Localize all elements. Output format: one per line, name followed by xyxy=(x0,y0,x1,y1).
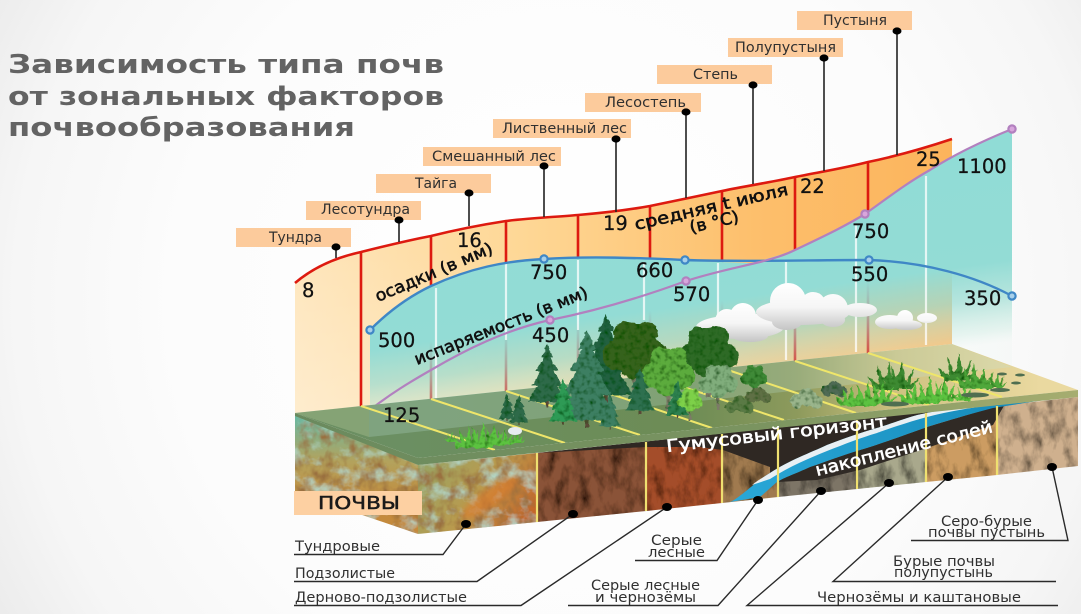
ground surface xyxy=(295,344,1078,458)
precipitation numbers: 660 xyxy=(636,259,673,282)
temperature numbers xyxy=(302,148,941,302)
soil block: front face xyxy=(418,397,1078,534)
clouds xyxy=(695,283,938,343)
soil type names: Тундровые xyxy=(294,539,380,555)
soils label: ПОЧВЫ xyxy=(318,493,400,514)
ground edge band xyxy=(295,390,1078,465)
humus label: Гумусовый горизонт xyxy=(665,412,888,457)
soil type names: Серо-бурые xyxy=(941,514,1032,530)
soil type names: Дерново-подзолистые xyxy=(295,590,467,606)
soil type names: и чернозёмы xyxy=(595,590,696,606)
natural zone labels: Полупустыня xyxy=(735,40,836,56)
natural zone labels: Тундра xyxy=(268,230,322,246)
precipitation curve xyxy=(366,255,1016,334)
evaporation numbers: 1100 xyxy=(957,155,1007,178)
grasses xyxy=(444,352,1008,448)
title: почвообразования xyxy=(8,113,355,143)
evaporation numbers: 450 xyxy=(532,324,569,347)
precipitation numbers: 750 xyxy=(530,261,567,284)
salt accumulation horizon xyxy=(777,404,1005,482)
title xyxy=(8,50,444,143)
evaporation numbers xyxy=(383,155,1007,427)
natural zone labels: Смешанный лес xyxy=(432,149,556,165)
curve label: evaporation: испаряемость (в мм) xyxy=(411,283,590,369)
temperature numbers: 16 xyxy=(457,229,482,252)
panel: moisture xyxy=(370,129,1012,408)
groundwater stream xyxy=(730,399,1050,502)
soil block: left face xyxy=(295,414,418,534)
natural zone labels: Тайга xyxy=(414,176,457,192)
soil type leaders xyxy=(294,463,1068,606)
temperature numbers: 25 xyxy=(916,148,941,171)
soil dividers xyxy=(537,406,997,522)
natural zone labels: Степь xyxy=(693,67,738,83)
temperature numbers: 19 xyxy=(603,212,628,235)
precipitation numbers xyxy=(378,259,1001,352)
natural zone labels: Лиственный лес xyxy=(502,121,627,137)
temperature numbers: 8 xyxy=(302,279,314,302)
soil type names: Серые лесные xyxy=(591,578,700,594)
natural zone labels: Лесотундра xyxy=(321,202,410,218)
temperature curve xyxy=(295,139,952,283)
title: Зависимость типа почв xyxy=(8,50,444,80)
panel: mean July temperature xyxy=(295,139,952,415)
soil type names: Серые xyxy=(651,533,702,549)
evaporation numbers: 125 xyxy=(383,404,420,427)
curve label: precipitation: осадки (в мм) xyxy=(372,239,496,306)
soil type names xyxy=(294,514,1045,606)
curve label: July temperature: (в °C) xyxy=(688,207,741,237)
soil type names: Бурые почвы xyxy=(893,554,995,570)
salts label: накопление солей xyxy=(813,417,995,481)
evaporation curve xyxy=(366,125,1016,414)
soil type names: лесные xyxy=(648,545,705,561)
curve label: July temperature: средняя t июля xyxy=(633,180,790,234)
soil type names: Подзолистые xyxy=(295,566,395,582)
soil type names: почвы пустынь xyxy=(928,525,1045,541)
natural zone labels: Пустыня xyxy=(823,13,887,29)
soil type names: Чернозёмы и каштановые xyxy=(817,590,1021,606)
evaporation numbers: 750 xyxy=(852,220,889,243)
humus horizon xyxy=(537,399,1050,473)
natural zone labels xyxy=(236,11,912,258)
evaporation numbers: 570 xyxy=(673,283,710,306)
temperature numbers: 22 xyxy=(800,175,825,198)
soils label xyxy=(294,491,422,515)
flower and dry-ground tufts xyxy=(508,372,1025,435)
natural zone labels: Лесостепь xyxy=(605,95,686,111)
title: от зональных факторов xyxy=(8,82,444,112)
trees xyxy=(499,314,846,429)
precipitation numbers: 500 xyxy=(378,329,415,352)
soil type names: полупустынь xyxy=(894,565,993,581)
precipitation numbers: 350 xyxy=(964,287,1001,310)
precipitation numbers: 550 xyxy=(851,263,888,286)
